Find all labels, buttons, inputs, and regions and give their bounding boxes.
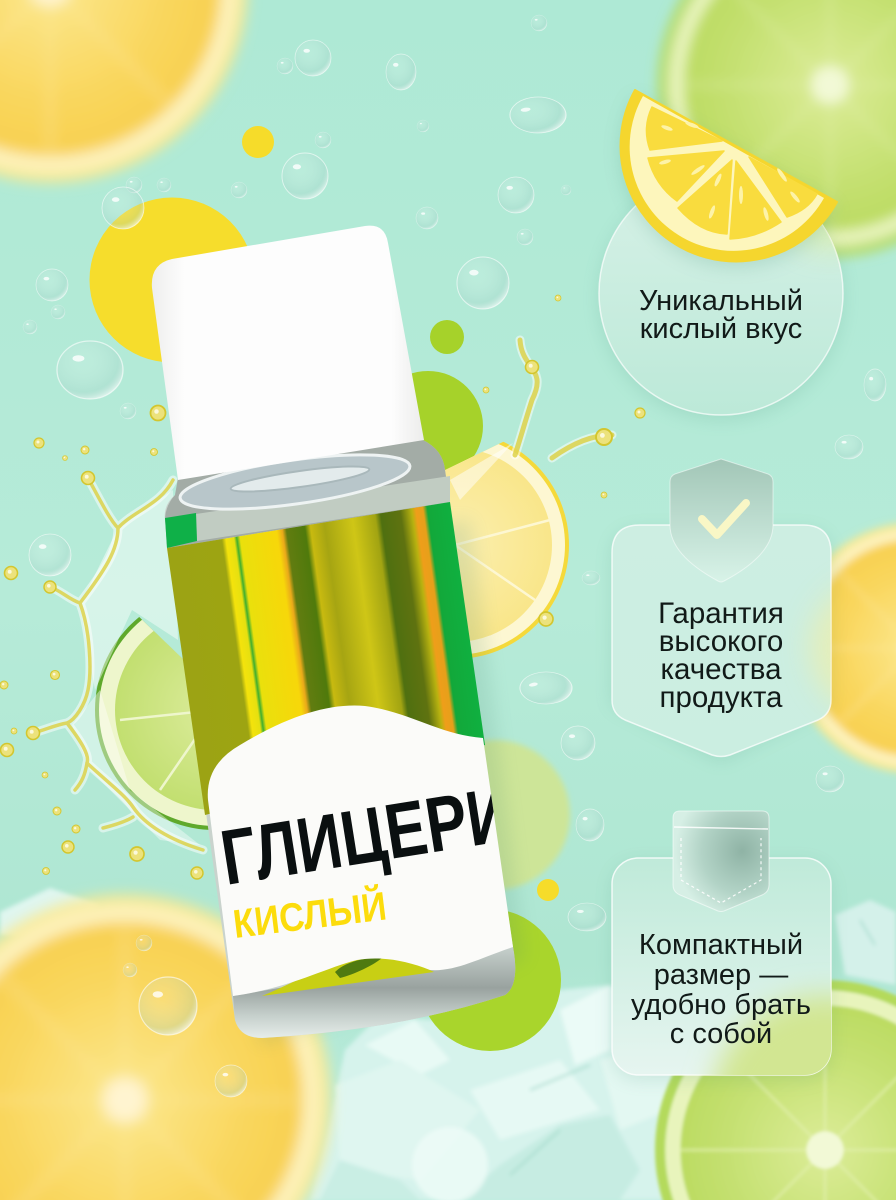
text: quality guarantee: высокого	[659, 625, 783, 658]
white cap	[152, 226, 424, 480]
bottle neck rim	[165, 440, 450, 548]
ice cubes	[0, 888, 896, 1200]
bottle	[152, 226, 561, 1045]
text: quality guarantee: продукта	[660, 681, 783, 714]
product flavour: КИСЛЫЙ	[231, 883, 389, 946]
blurred citrus: top left lemon	[0, 0, 247, 182]
panel: unique taste	[598, 205, 844, 422]
icon: shield with check	[670, 459, 773, 582]
panel: compact size	[608, 857, 836, 1084]
text: quality guarantee: Гарантия	[658, 597, 784, 630]
icon: pocket	[673, 811, 769, 912]
text: unique taste: кислый вкус	[640, 313, 802, 345]
text: compact size: размер —	[654, 959, 788, 991]
product name: ГЛИЦЕРИН	[215, 762, 561, 901]
text: compact size: удобно брать	[631, 989, 811, 1021]
text: compact size: с собой	[670, 1018, 772, 1050]
lime slice left of bottle	[95, 617, 208, 830]
lemon slice behind bottle	[445, 442, 569, 658]
blurred citrus: top right lime	[658, 0, 896, 257]
bottle shadow	[190, 520, 525, 1045]
white label	[208, 706, 513, 996]
text: quality guarantee: качества	[660, 653, 782, 686]
iridescent foil	[167, 502, 485, 815]
text: compact size: Компактный	[639, 929, 803, 961]
juice splashes	[33, 340, 612, 850]
citrus: bottom right lime	[655, 980, 896, 1200]
panel: quality guarantee	[610, 524, 837, 760]
foil wave dark streak	[335, 958, 382, 978]
blurred citrus: right lemon	[790, 523, 896, 773]
foil wave at label bottom	[262, 957, 434, 996]
text: unique taste: Уникальный	[639, 285, 803, 317]
blurred citrus: lime behind bottle	[420, 740, 570, 890]
juice droplets	[0, 295, 645, 879]
bottle base glass	[233, 947, 515, 1038]
blurred citrus: bottom left lemon	[0, 895, 330, 1200]
decorative circles	[90, 126, 561, 1051]
lemon wedge	[621, 90, 837, 267]
glass bottle body	[165, 440, 515, 1038]
